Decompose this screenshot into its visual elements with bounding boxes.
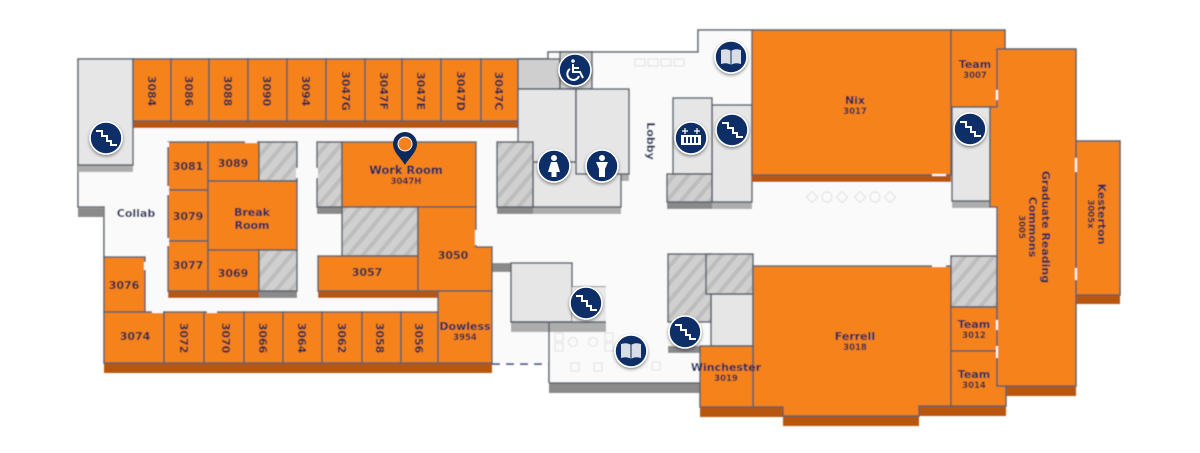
room Team 3007 bbox=[951, 30, 1005, 107]
block shadow bbox=[168, 291, 297, 298]
room Dowless: 3954 bbox=[453, 333, 477, 343]
room Nix: 3017 bbox=[843, 107, 867, 117]
icon: stairs lobby bbox=[716, 114, 748, 146]
room Kesterton bbox=[1076, 141, 1120, 295]
room 3072: 3072 bbox=[177, 323, 190, 353]
east stair room bbox=[952, 107, 990, 208]
restroom core bbox=[497, 52, 629, 214]
room Team 3012: Team bbox=[958, 318, 990, 331]
room 3058: 3058 bbox=[373, 323, 386, 353]
room 3069: 3069 bbox=[218, 267, 248, 280]
icon: book south bbox=[615, 335, 647, 367]
room Team 3014: 3014 bbox=[962, 381, 986, 391]
room 3062: 3062 bbox=[335, 323, 348, 353]
room Winchester bbox=[691, 346, 762, 407]
room 3081 bbox=[168, 142, 208, 190]
lobby furniture bbox=[635, 59, 684, 66]
stair room west bbox=[78, 59, 133, 172]
room 3090 bbox=[248, 59, 287, 121]
south east core bbox=[668, 254, 753, 353]
row shadow bbox=[104, 363, 492, 373]
room 3081: 3081 bbox=[173, 160, 203, 173]
diamond furniture bbox=[806, 191, 896, 203]
icon: location pin bbox=[393, 132, 417, 165]
room 3094: 3094 bbox=[299, 76, 312, 107]
room Ferrell: Ferrell bbox=[835, 330, 875, 343]
room 3086: 3086 bbox=[182, 76, 195, 107]
room 3047F: 3047F bbox=[377, 72, 390, 110]
room 3077: 3077 bbox=[173, 259, 203, 272]
room 3066 bbox=[244, 312, 283, 363]
room Winchester: 3019 bbox=[714, 374, 738, 384]
room Ferrell bbox=[753, 266, 951, 416]
room 3084 bbox=[133, 59, 171, 121]
room 3047C: 3047C bbox=[492, 72, 505, 110]
icon: stairs west bbox=[90, 122, 122, 154]
outer wall: lobby top bbox=[518, 30, 752, 59]
west block of rooms bbox=[168, 142, 297, 298]
room Dowless: Dowless bbox=[439, 320, 491, 333]
room 3050: 3050 bbox=[438, 249, 469, 262]
room 3050 bbox=[418, 207, 492, 291]
room Nix: Nix bbox=[845, 94, 865, 107]
bottom shadows of east rooms bbox=[700, 175, 1120, 426]
hatched closet bbox=[317, 142, 342, 207]
hatched storage bbox=[342, 207, 418, 256]
room Graduate Reading Commons: 3005 bbox=[1016, 215, 1026, 239]
room 3086 bbox=[171, 59, 209, 121]
icon: book north bbox=[715, 41, 747, 73]
hatched closet east bbox=[951, 256, 997, 307]
room Ferrell: 3018 bbox=[843, 343, 867, 353]
work room: 3047H bbox=[391, 177, 421, 187]
work room bbox=[342, 142, 476, 207]
top row of rooms bbox=[133, 59, 518, 121]
room 3047E: 3047E bbox=[414, 72, 427, 110]
room 3076: 3076 bbox=[109, 279, 140, 292]
room 3089: 3089 bbox=[218, 157, 248, 170]
room 3077 bbox=[168, 241, 208, 291]
icon: women's restroom bbox=[538, 150, 570, 182]
room Team 3014: Team bbox=[958, 368, 990, 381]
room 3089 bbox=[208, 142, 259, 181]
icon: elevator bbox=[675, 122, 707, 154]
room Dowless bbox=[438, 291, 492, 363]
room 3084: 3084 bbox=[145, 76, 158, 107]
room 3074 bbox=[104, 312, 164, 363]
west wall shadow bbox=[78, 208, 104, 217]
room 3064 bbox=[283, 312, 322, 363]
room 3057: 3057 bbox=[352, 266, 382, 279]
room 3047E bbox=[402, 59, 441, 121]
south stair room bbox=[511, 263, 700, 393]
room 3090: 3090 bbox=[260, 76, 273, 107]
dashed boundary bbox=[492, 363, 549, 365]
room Team 3007: Team bbox=[959, 58, 991, 71]
room 3062 bbox=[322, 312, 362, 363]
lobby label: Lobby bbox=[644, 122, 657, 160]
top room shadow bbox=[133, 121, 518, 128]
hatched closet bbox=[259, 142, 297, 181]
south lounge furniture bbox=[555, 333, 660, 371]
collab label: Collab bbox=[117, 207, 155, 220]
room 3066: 3066 bbox=[256, 323, 269, 354]
room 3070: 3070 bbox=[219, 323, 232, 354]
room 3047D bbox=[441, 59, 481, 121]
room 3056 bbox=[401, 312, 438, 363]
block shadows bbox=[317, 207, 533, 298]
icon: stairs south east bbox=[669, 316, 701, 348]
room Graduate Reading Commons bbox=[990, 49, 1076, 386]
icon: men's restroom bbox=[586, 150, 618, 182]
icon: stairs east bbox=[954, 113, 986, 145]
room 3047G bbox=[326, 59, 365, 121]
room Kesterton: 3005x bbox=[1085, 199, 1095, 229]
room Team 3012 bbox=[951, 307, 997, 351]
break room: Break bbox=[234, 206, 271, 219]
icon: wheelchair bbox=[559, 54, 591, 86]
outer wall: west bbox=[78, 165, 104, 258]
floor plan bbox=[78, 30, 1120, 426]
room 3076 bbox=[104, 257, 145, 312]
room 3047F bbox=[365, 59, 402, 121]
room 3056: 3056 bbox=[412, 323, 425, 354]
south row of rooms bbox=[104, 291, 492, 373]
room Team 3012: 3012 bbox=[962, 331, 986, 341]
room 3072 bbox=[164, 312, 204, 363]
room 3094 bbox=[287, 59, 326, 121]
room 3088 bbox=[209, 59, 248, 121]
room 3064: 3064 bbox=[295, 323, 308, 354]
room 3047G: 3047G bbox=[339, 71, 352, 111]
room 3047C bbox=[481, 59, 518, 121]
room 3070 bbox=[204, 312, 244, 363]
work room: Work Room bbox=[369, 163, 443, 177]
room Winchester: Winchester bbox=[691, 361, 762, 374]
central block of rooms bbox=[317, 142, 533, 298]
break room bbox=[208, 181, 297, 250]
floor area bbox=[78, 30, 1000, 400]
room 3079 bbox=[168, 190, 208, 241]
icon: stairs south bbox=[570, 287, 602, 319]
room Graduate Reading Commons: Commons bbox=[1026, 197, 1039, 258]
room 3088: 3088 bbox=[221, 76, 234, 106]
elevator core bbox=[667, 98, 752, 209]
break room: Room bbox=[234, 219, 270, 232]
room 3079: 3079 bbox=[173, 210, 203, 223]
room Team 3014 bbox=[951, 351, 1006, 406]
room 3058 bbox=[362, 312, 401, 363]
room Graduate Reading Commons: Graduate Reading bbox=[1039, 171, 1052, 283]
room Nix bbox=[752, 30, 951, 175]
room Kesterton: Kesterton bbox=[1095, 183, 1108, 245]
room 3069 bbox=[208, 250, 259, 291]
room 3047D: 3047D bbox=[454, 71, 467, 111]
hatched closet bbox=[259, 250, 297, 291]
room Team 3007: 3007 bbox=[963, 71, 987, 81]
room 3074: 3074 bbox=[120, 330, 151, 343]
room 3057 bbox=[318, 256, 418, 291]
